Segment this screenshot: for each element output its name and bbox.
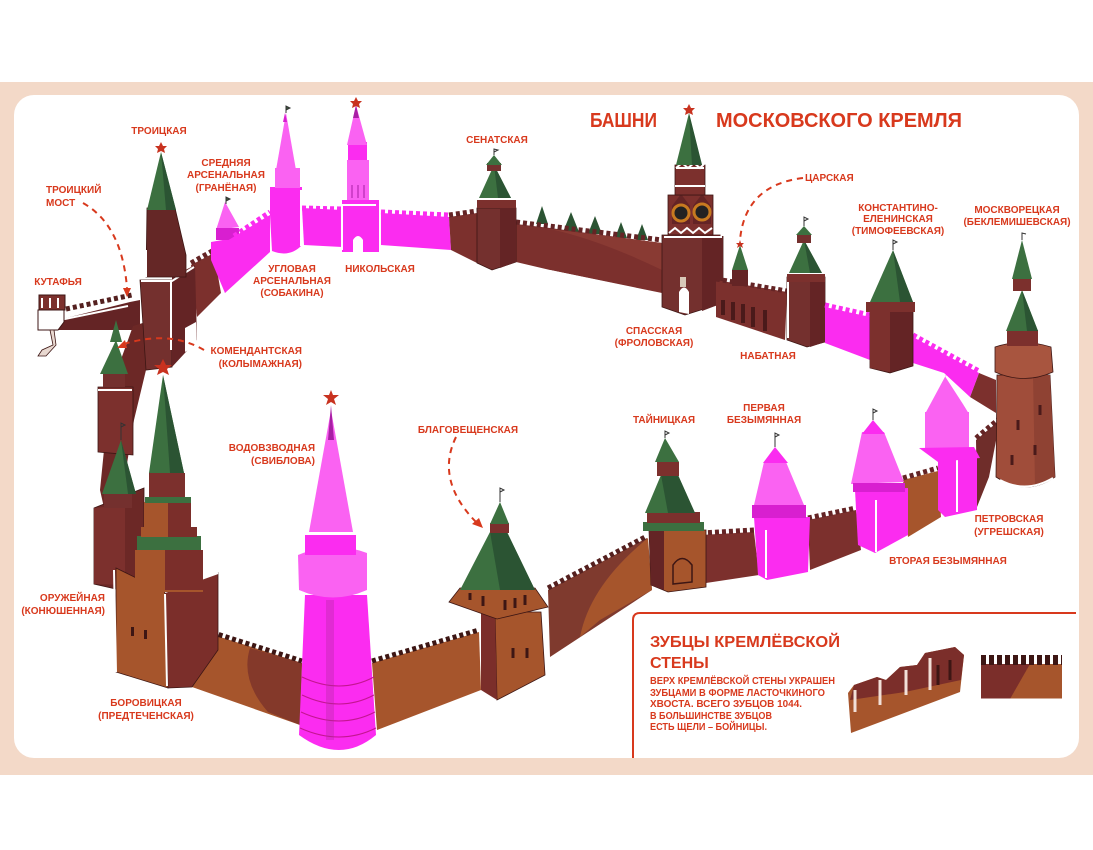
labels: СЕНАТСКАЯ [466, 135, 528, 146]
labels: СПАССКАЯ [626, 326, 682, 337]
labels [21, 126, 1071, 722]
tower: Konstantino-Eleninskaya [866, 240, 915, 373]
tower: Senatskaya [477, 149, 516, 270]
title: МОСКОВСКОГО КРЕМЛЯ [716, 110, 962, 132]
labels: (СВИБЛОВА) [251, 456, 315, 467]
wall: magenta north [302, 208, 342, 247]
trees [536, 206, 648, 240]
tower: Vtoraya Bezymyannaya [851, 409, 908, 553]
labels: КОНСТАНТИНО- [858, 203, 938, 214]
wall: to Pervaya [701, 530, 759, 583]
wall: to Vtoraya [808, 508, 861, 570]
wall: magenta north 2 [381, 212, 451, 250]
panel text: ВЕРХ КРЕМЛЁВСКОЙ СТЕНЫ УКРАШЕН [650, 674, 835, 687]
labels: ОРУЖЕЙНАЯ [40, 591, 105, 604]
labels: ПЕРВАЯ [743, 403, 785, 414]
tower: Nabatnaya [787, 217, 825, 347]
wall: to Petrovskaya [903, 468, 941, 537]
panel heading [650, 632, 840, 672]
wall: north-west segment [191, 250, 221, 317]
tower: Kutafya [38, 295, 65, 356]
wall: Borovitskaya to Vodovzvodnaya [192, 626, 302, 727]
tower: Petrovskaya [919, 375, 980, 517]
wall: magenta east 2 [913, 335, 996, 413]
merlon close-up [848, 647, 964, 733]
labels: (ПРЕДТЕЧЕНСКАЯ) [98, 711, 194, 722]
panel text: ЕСТЬ ЩЕЛИ – БОЙНИЦЫ. [650, 720, 767, 733]
title [590, 110, 962, 132]
tower: Pervaya Bezymyannaya [752, 433, 810, 580]
labels: ПЕТРОВСКАЯ [975, 514, 1043, 525]
tower: Tsarskaya [732, 240, 748, 286]
labels: БЕЗЫМЯННАЯ [727, 415, 801, 426]
labels: (ГРАНЁНАЯ) [196, 181, 256, 194]
labels: ТРОИЦКАЯ [131, 126, 187, 137]
tower: Tainitskaya [643, 431, 706, 592]
panel text: ХВОСТА. ВСЕГО ЗУБЦОВ 1044. [650, 699, 802, 710]
tower: Moskvoretskaya [995, 233, 1055, 487]
labels: (КОЛЫМАЖНАЯ) [219, 359, 302, 370]
merlon wall fragment [981, 660, 1062, 699]
wall: Senate to Spasskaya [516, 222, 662, 294]
labels: АРСЕНАЛЬНАЯ [253, 276, 331, 287]
wall: Tainitskaya to Blagoveshchenskaya [548, 536, 652, 657]
title: БАШНИ [590, 110, 657, 132]
labels: КОМЕНДАНТСКАЯ [210, 346, 302, 357]
tower: Borovitskaya [114, 359, 218, 688]
labels: КУТАФЬЯ [34, 277, 82, 288]
tower: Komendantskaya [98, 320, 133, 455]
panel: merlons of the Kremlin wall [633, 613, 1076, 758]
labels: НИКОЛЬСКАЯ [345, 264, 415, 275]
wall: brown to Senatskaya [449, 211, 477, 263]
arrow: Komendantskaya [117, 338, 204, 350]
labels: ТАЙНИЦКАЯ [633, 413, 695, 426]
labels: СРЕДНЯЯ [201, 158, 251, 169]
labels: МОСКВОРЕЦКАЯ [974, 205, 1060, 216]
tower: Blagoveshchenskaya [449, 488, 548, 700]
arrow: Troitsky bridge [83, 203, 131, 297]
labels: МОСТ [46, 198, 75, 209]
labels: (ФРОЛОВСКАЯ) [615, 338, 693, 349]
panel text [650, 674, 835, 733]
labels: БЛАГОВЕЩЕНСКАЯ [418, 425, 518, 436]
wall: Vodovzvodnaya to Blagoveshchenskaya [372, 630, 481, 731]
tower: Nikolskaya [342, 97, 379, 252]
labels: ТРОИЦКИЙ [46, 183, 101, 196]
wall: Nabatnaya segment [716, 279, 787, 340]
labels: (БЕКЛЕМИШЕВСКАЯ) [963, 217, 1071, 228]
labels: (СОБАКИНА) [260, 288, 324, 299]
labels: АРСЕНАЛЬНАЯ [187, 170, 265, 181]
tower: Oruzheynaya [94, 423, 144, 590]
labels: УГЛОВАЯ [268, 264, 316, 275]
labels: (ТИМОФЕЕВСКАЯ) [852, 226, 944, 237]
panel heading: ЗУБЦЫ КРЕМЛЁВСКОЙ [650, 632, 840, 651]
tower: Vodovzvodnaya [298, 390, 376, 750]
arrow: Tsarskaya [740, 178, 803, 240]
arrow: Blagoveshchenskaya [449, 437, 483, 528]
labels: (УГРЕШСКАЯ) [974, 527, 1044, 538]
wall: Kutafya bridge [56, 295, 140, 330]
labels: НАБАТНАЯ [740, 351, 796, 362]
panel heading: СТЕНЫ [650, 655, 709, 672]
tower: Troitskaya [140, 142, 197, 370]
wall: east side [976, 418, 1000, 507]
labels: ВТОРАЯ БЕЗЫМЯННАЯ [889, 556, 1007, 567]
labels: ВОДОВЗВОДНАЯ [229, 443, 315, 454]
labels: ЦАРСКАЯ [805, 173, 854, 184]
panel text: ЗУБЦАМИ В ФОРМЕ ЛАСТОЧКИНОГО [650, 688, 825, 699]
labels: ЕЛЕНИНСКАЯ [863, 214, 933, 225]
wall: Troitskaya to Komendantskaya [100, 322, 146, 570]
tower: Uglovaya Arsenalnaya [270, 106, 302, 253]
labels: (КОНЮШЕННАЯ) [21, 606, 105, 617]
wall: magenta east 1 [825, 305, 870, 360]
labels: БОРОВИЦКАЯ [110, 698, 182, 709]
panel text: В БОЛЬШИНСТВЕ ЗУБЦОВ [650, 711, 772, 722]
wall: magenta north-west [212, 212, 270, 293]
tower: Spasskaya [660, 104, 723, 315]
tower: Srednyaya Arsenalnaya [211, 197, 246, 293]
